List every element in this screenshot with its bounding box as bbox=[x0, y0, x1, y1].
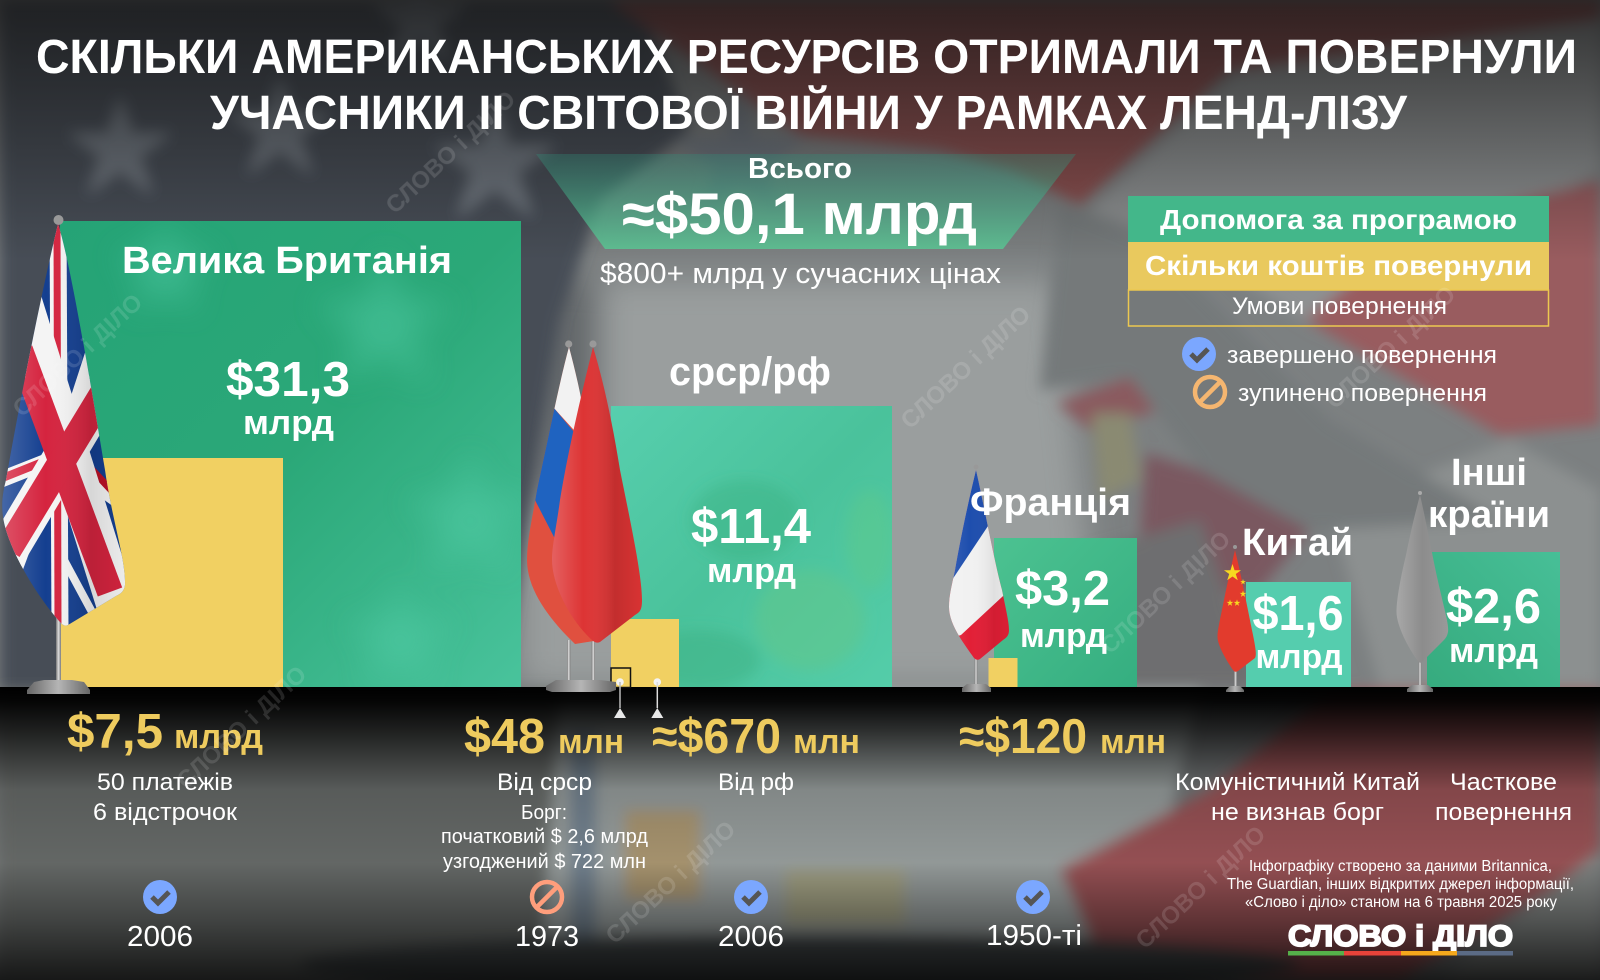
block: умови інші країни bbox=[1435, 769, 1572, 826]
watermarks: СЛОВО і ДІЛО bbox=[8, 289, 148, 422]
block: умови інші країни: повернення bbox=[1435, 799, 1572, 826]
block: повернення Франція: ≈$120 bbox=[959, 710, 1087, 764]
block: умови Китай: не визнав борг bbox=[1211, 799, 1384, 826]
block: повернення Велика Британія: млрд bbox=[174, 718, 263, 756]
block: повернення срср: Від срср bbox=[497, 769, 592, 796]
watermarks: СЛОВО і ДІЛО bbox=[381, 86, 521, 219]
panel: Китай: $1,6 bbox=[1252, 587, 1344, 641]
block: умови інші країни: Часткове bbox=[1450, 769, 1557, 796]
block: повернення срср: 1973 bbox=[515, 921, 579, 953]
block: повернення Велика Британія: 6 відстрочок bbox=[93, 799, 237, 826]
panel: Франція bbox=[945, 464, 1137, 692]
title: УЧАСНИКИ ІІ СВІТОВОЇ ВІЙНИ У РАМКАХ ЛЕНД-ЛІЗУ bbox=[210, 85, 1408, 140]
block: повернення рф: Від рф bbox=[718, 769, 794, 796]
watermarks: СЛОВО і ДІЛО bbox=[172, 661, 312, 794]
watermarks: СЛОВО і ДІЛО bbox=[1321, 281, 1461, 414]
panel: Інші країни: $2,6 bbox=[1446, 580, 1541, 634]
legend: завершено повернення bbox=[1227, 342, 1497, 369]
legend: Умови повернення bbox=[1232, 293, 1447, 320]
block: повернення рф: 2006 bbox=[718, 921, 784, 953]
watermarks: СЛОВО і ДІЛО bbox=[1096, 526, 1236, 659]
flag: Велика Британія bbox=[0, 215, 130, 694]
block: повернення срср: $48 bbox=[464, 710, 545, 764]
panel: срср/рф: срср/рф bbox=[669, 350, 831, 394]
total callout: Всього bbox=[748, 153, 852, 185]
source note bbox=[1227, 858, 1574, 911]
legend bbox=[1128, 196, 1549, 407]
panel: Франція: Франція bbox=[970, 482, 1131, 524]
panel: Франція: $3,2 bbox=[1015, 562, 1110, 616]
panel: Китай bbox=[1218, 522, 1353, 692]
total callout: ≈$50,1 млрд bbox=[622, 182, 977, 247]
block: повернення срср: узгоджений $ 722 млн bbox=[443, 850, 646, 873]
block: повернення срср: млн bbox=[558, 723, 624, 761]
flag: інші країни bbox=[1396, 491, 1448, 692]
panel: Велика Британія: млрд bbox=[243, 404, 334, 442]
panel: срср/рф: $11,4 bbox=[691, 500, 811, 554]
block: повернення Велика Британія: 2006 bbox=[127, 921, 193, 953]
flags: росія і срср bbox=[520, 340, 642, 692]
panel: Інші країни: Інші bbox=[1451, 452, 1527, 494]
legend: Допомога за програмою bbox=[1160, 204, 1517, 235]
panel: Інші країни: країни bbox=[1428, 494, 1550, 536]
block: повернення Франція: млн bbox=[1100, 723, 1166, 761]
block: повернення срср: Борг: bbox=[521, 801, 567, 824]
pointers: роздільні суми bbox=[614, 678, 663, 718]
block: повернення Франція bbox=[959, 710, 1166, 952]
block: умови Китай bbox=[1175, 769, 1420, 826]
block: умови Китай: Комуністичний Китай bbox=[1175, 769, 1420, 796]
panel: Франція: млрд bbox=[1020, 617, 1107, 655]
panel: Велика Британія: $31,3 bbox=[226, 353, 350, 407]
panel: Китай: Китай bbox=[1242, 522, 1353, 564]
panel: срср/рф bbox=[520, 340, 894, 692]
block: повернення Велика Британія: 50 платежів bbox=[97, 769, 233, 796]
panel: Інші країни bbox=[1396, 452, 1560, 692]
panel: Велика Британія bbox=[60, 215, 537, 689]
panel: срср/рф: млрд bbox=[707, 552, 796, 590]
watermarks: СЛОВО і ДІЛО bbox=[896, 301, 1036, 434]
total callout: $800+ млрд у сучасних цінах bbox=[600, 258, 1002, 290]
block: повернення рф: млн bbox=[793, 723, 860, 761]
flag: Франція bbox=[949, 470, 1009, 692]
block: повернення срср bbox=[441, 710, 648, 953]
title bbox=[36, 31, 1577, 140]
flag: Китай bbox=[1218, 545, 1256, 692]
source note: «Слово і діло» станом на 6 травня 2025 року bbox=[1245, 894, 1557, 911]
panel: Інші країни: млрд bbox=[1449, 632, 1538, 670]
legend: зупинено повернення bbox=[1238, 380, 1487, 407]
watermarks: СЛОВО і ДІЛО bbox=[1131, 821, 1271, 954]
block: повернення Велика Британія: $7,5 bbox=[67, 705, 163, 759]
block: повернення рф bbox=[652, 710, 860, 953]
block: повернення Франція: 1950-ті bbox=[986, 920, 1082, 952]
block: повернення рф: ≈$670 bbox=[652, 710, 781, 764]
block: повернення Велика Британія bbox=[67, 705, 263, 953]
watermarks: СЛОВО і ДІЛО bbox=[601, 816, 741, 949]
block: повернення срср: початковий $ 2,6 млрд bbox=[441, 825, 648, 848]
logo: СЛОВО і ДІЛО bbox=[1288, 920, 1513, 953]
legend: Скільки коштів повернули bbox=[1145, 250, 1532, 281]
source note: Інфографіку створено за даними Britannica, bbox=[1249, 858, 1552, 875]
title: СКІЛЬКИ АМЕРИКАНСЬКИХ РЕСУРСІВ ОТРИМАЛИ ТА ПОВЕРНУЛИ bbox=[36, 31, 1577, 84]
source note: The Guardian, інших відкритих джерел інформації, bbox=[1227, 876, 1574, 893]
panel: Китай: млрд bbox=[1256, 638, 1342, 676]
panel: Велика Британія: Велика Британія bbox=[122, 240, 452, 282]
total callout bbox=[536, 153, 1076, 290]
